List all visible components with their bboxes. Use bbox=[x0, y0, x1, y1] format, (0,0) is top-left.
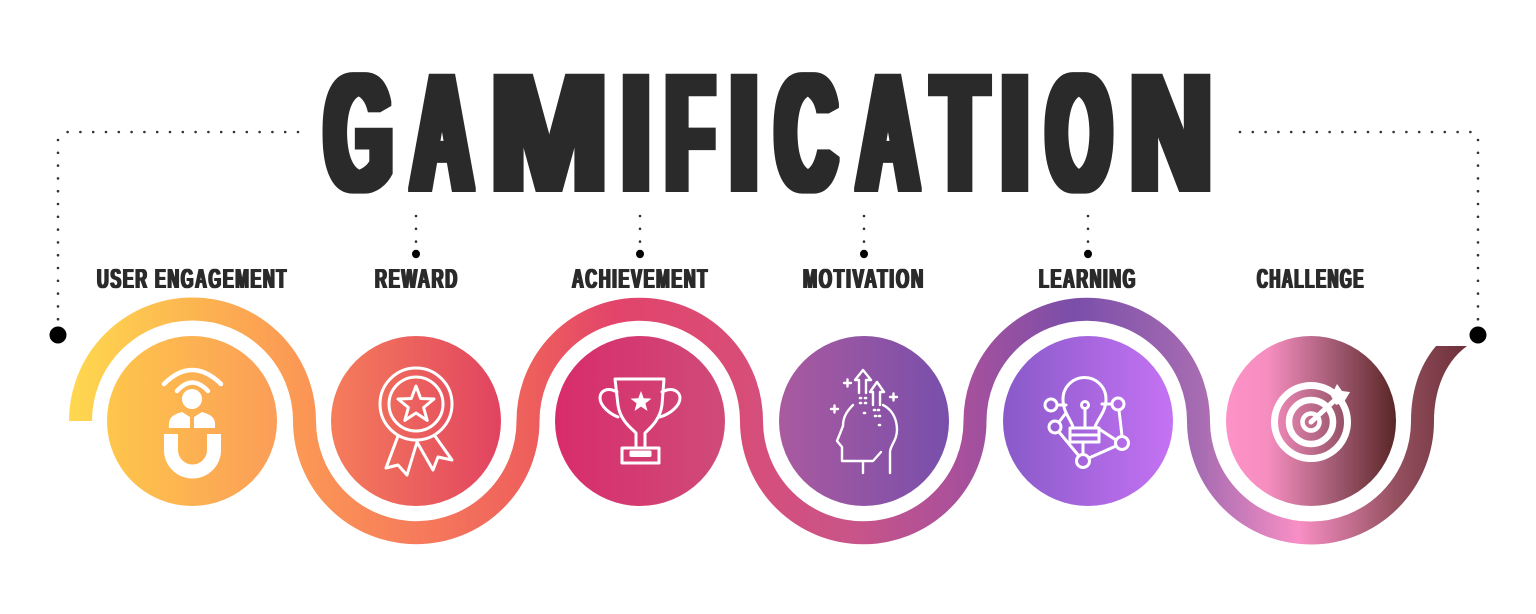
title: G bbox=[325, 41, 392, 226]
title: T bbox=[933, 41, 987, 226]
panel: reward circle and icon bbox=[331, 336, 501, 506]
title: I bbox=[622, 41, 650, 226]
title: I bbox=[730, 41, 758, 226]
panel: achievement circle and icon bbox=[555, 336, 725, 506]
wavy gradient ribbon bbox=[80, 309, 1467, 533]
icon: medal with ribbons bbox=[380, 368, 452, 475]
label: challenge: CHALLENGE bbox=[1257, 263, 1365, 294]
dotted connector: learning bbox=[1084, 216, 1092, 258]
dotted connector: reward bbox=[412, 216, 420, 258]
title: N bbox=[1130, 41, 1212, 226]
panel: learning circle and icon bbox=[1003, 336, 1173, 506]
title: A bbox=[858, 41, 918, 226]
icon: head with rising arrows bbox=[831, 370, 897, 473]
title: O bbox=[1047, 41, 1111, 226]
label: learning: LEARNING bbox=[1039, 263, 1137, 294]
icon: target with arrow bbox=[1274, 384, 1350, 458]
dotted connector: achievement bbox=[636, 216, 644, 258]
title: A bbox=[412, 41, 472, 226]
label: reward: REWARD bbox=[375, 263, 459, 294]
panel: challenge circle and icon bbox=[1226, 336, 1396, 506]
dotted connector: motivation bbox=[860, 216, 868, 258]
icon: light bulb network bbox=[1045, 378, 1128, 468]
icon: person with signal and magnet bbox=[164, 370, 221, 472]
title: I bbox=[1001, 41, 1029, 226]
panel: user engagement circle and icon bbox=[107, 336, 277, 506]
label: user engagement: USER ENGAGEMENT bbox=[97, 263, 288, 294]
dotted connector: right bbox=[1240, 132, 1486, 344]
label: achievement: ACHIEVEMENT bbox=[572, 263, 709, 294]
dotted connector: left bbox=[50, 132, 298, 344]
title: C bbox=[776, 41, 836, 226]
title: F bbox=[666, 41, 713, 226]
icon: trophy bbox=[600, 379, 680, 463]
label: motivation: MOTIVATION bbox=[803, 263, 925, 294]
panel: motivation circle and icon bbox=[779, 336, 949, 506]
title: M bbox=[490, 41, 608, 226]
